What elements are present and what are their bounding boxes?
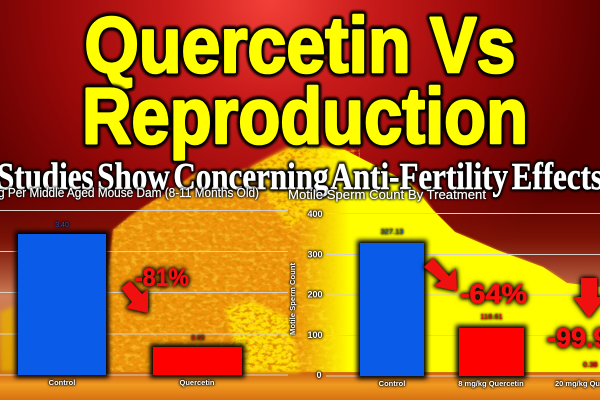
title: Quercetin Vs — [84, 0, 516, 89]
y axis labels: 400 — [307, 209, 323, 219]
title: Quercetin Vs — [84, 0, 516, 89]
label: -64%: -64% — [460, 279, 527, 309]
arrow: down — [573, 278, 600, 318]
y axis labels: 0 — [316, 370, 322, 380]
bar: quercetin: 0.65 — [191, 335, 205, 342]
bar: control — [15, 222, 109, 387]
bar: control: 327.13 — [381, 227, 403, 236]
title — [82, 0, 528, 160]
bar: control: Control — [49, 378, 75, 387]
bar: quercetin: Quercetin — [179, 378, 215, 387]
title: Reproduction — [82, 71, 528, 160]
bar: control — [357, 227, 427, 388]
left chart — [0, 186, 288, 387]
bar: quercetin — [150, 335, 245, 387]
right chart — [288, 188, 600, 388]
title: Reproduction — [82, 71, 528, 160]
bar: 8 mg/kg quercetin — [456, 312, 527, 388]
bar: 8 mg/kg quercetin: 8 mg/kg Quercetin — [458, 379, 524, 388]
bar: 20 mg/kg quercetin: 0.38 — [583, 360, 598, 369]
right chart grid lines — [326, 214, 600, 376]
quercetin powder mountain — [0, 143, 600, 372]
y axis labels: 200 — [307, 290, 323, 300]
arrow: down-right — [121, 281, 148, 313]
y axis labels — [307, 209, 323, 380]
arrow: down-right — [424, 258, 457, 291]
y axis title: Motile Sperm Count — [288, 263, 297, 335]
left chart grid lines — [0, 210, 288, 375]
label: -81%: -81% — [135, 264, 189, 292]
bar: 20 mg/kg quercetin — [555, 360, 600, 388]
bar: 8 mg/kg quercetin: 118.61 — [480, 312, 503, 321]
y axis labels: 100 — [307, 330, 323, 340]
y axis labels: 300 — [307, 250, 323, 260]
bar: control: Control — [379, 379, 405, 388]
bar: control: 3.40 — [55, 222, 69, 229]
left chart title: g Per Middle Aged Mouse Dam (8-11 Months Old) — [0, 186, 259, 200]
right chart title: Motile Sperm Count By Treatment — [288, 188, 487, 202]
